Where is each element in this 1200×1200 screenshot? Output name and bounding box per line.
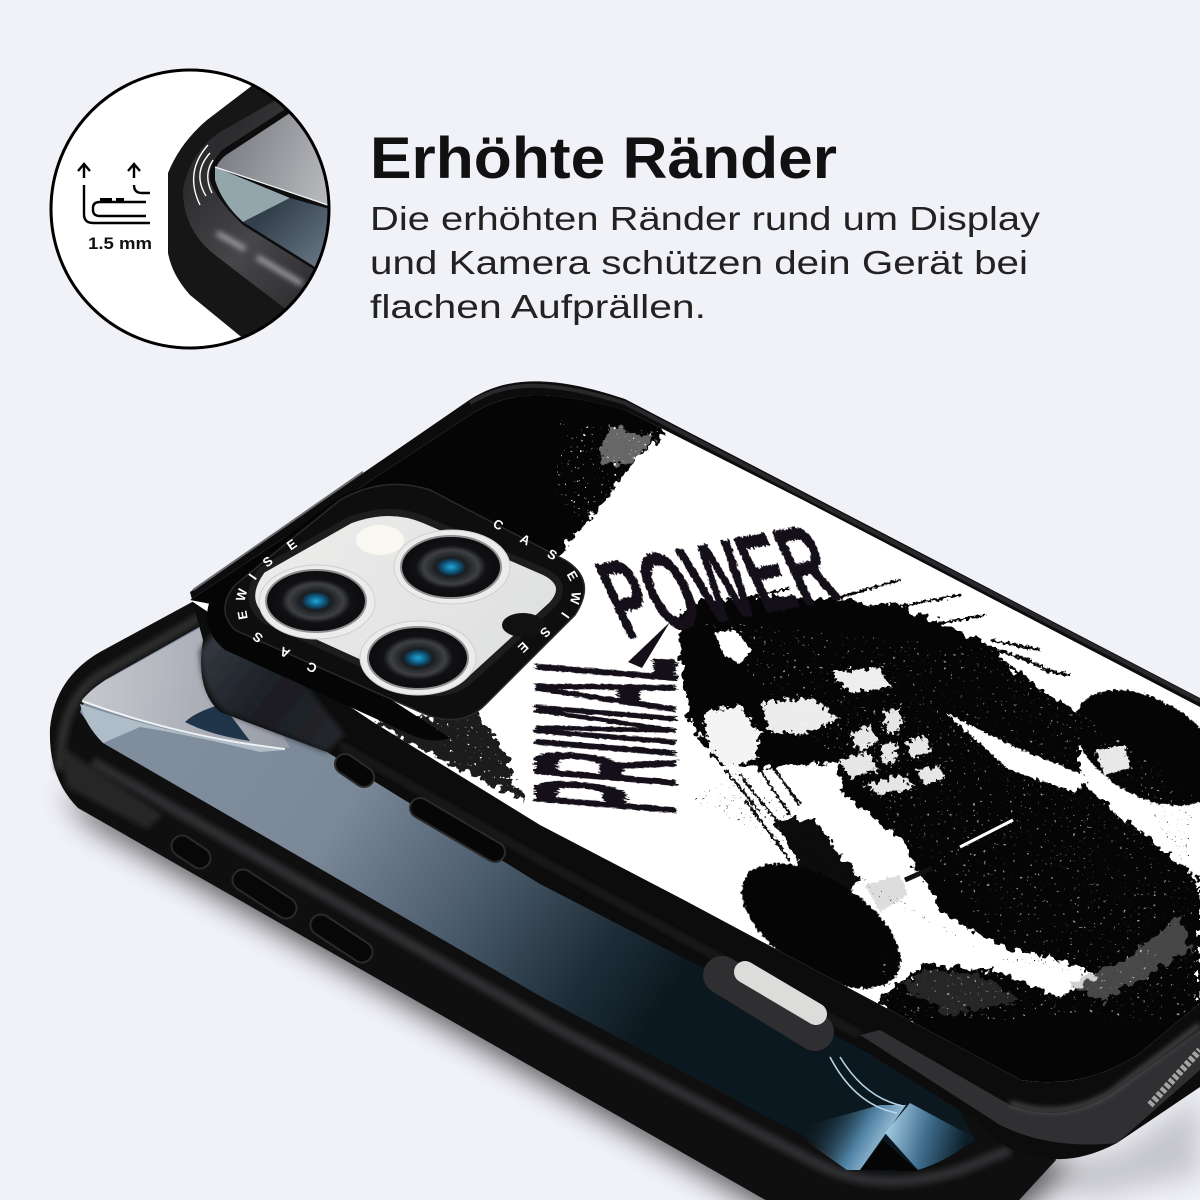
ring lettering: CASEWISE: C — [491, 516, 506, 534]
microphone hole — [502, 613, 544, 637]
text: POWER: POWER — [580, 501, 855, 663]
ring lettering: CASEWISE: E — [284, 536, 300, 553]
camera plate — [252, 512, 560, 692]
torso and legs — [836, 758, 1200, 978]
label: 1.5 mm: 1.5 mm — [88, 234, 152, 253]
figure grain — [700, 620, 1200, 960]
ring lettering: CASEWISE: E — [564, 568, 581, 584]
case side band — [340, 745, 860, 1035]
lettering spike — [628, 622, 670, 668]
white face patch — [714, 630, 752, 664]
side buttons on case — [345, 764, 495, 852]
ink spray below camera — [374, 712, 526, 804]
body text: und Kamera schützen dein Gerät bei — [370, 244, 1028, 281]
back phone shadow — [60, 790, 1070, 1200]
screen dark wedge — [185, 704, 250, 741]
silver edge — [1150, 1050, 1200, 1105]
ring lettering: CASEWISE: A — [518, 531, 533, 549]
back phone bumper — [50, 595, 1056, 1200]
ring lettering: CASEWISE: S — [545, 546, 560, 563]
right weight plate — [1076, 688, 1200, 807]
island side shadow — [207, 482, 470, 740]
ring lettering: CASEWISE: S — [250, 629, 266, 646]
ring lettering: CASEWISE: S — [537, 624, 554, 641]
charging port — [722, 975, 815, 1032]
artwork white ground — [180, 380, 1200, 1100]
front phone: case back — [190, 381, 1200, 1159]
left weight plate — [740, 862, 902, 990]
left arm — [725, 770, 860, 900]
screen grey area — [82, 618, 290, 748]
corner lighter band — [860, 1030, 1200, 1145]
hand and bar — [865, 875, 908, 912]
chest highlights — [838, 708, 945, 795]
body text — [370, 200, 1041, 325]
ink speckles — [695, 719, 1199, 980]
carbon corner patch — [60, 746, 163, 829]
screen blue tip — [790, 1057, 975, 1171]
barbell highlight — [960, 820, 1013, 847]
case outer body — [190, 381, 1200, 1159]
side buttons — [182, 846, 362, 952]
ring lettering: CASEWISE: E — [515, 639, 532, 656]
camera island — [207, 482, 584, 740]
lens: bottom — [360, 621, 476, 695]
white arm and shoulder patches — [704, 706, 760, 768]
icon: raised edge diagram — [78, 164, 150, 223]
ring lettering: CASEWISE: W — [567, 591, 584, 606]
lens: top — [394, 530, 510, 604]
ring lettering: CASEWISE: I — [558, 610, 573, 621]
ring lettering: CASEWISE: C — [304, 658, 319, 676]
detail circle: raised edges — [51, 70, 340, 348]
island ring — [225, 484, 584, 720]
ring lettering: CASEWISE: S — [260, 553, 276, 570]
screen pale area — [80, 704, 285, 752]
back phone screen — [80, 618, 975, 1172]
back phone: front side with screen — [50, 595, 1056, 1200]
hair and head — [676, 594, 1082, 772]
ring lettering: CASEWISE: E — [234, 609, 251, 621]
bottom ink smudge — [878, 914, 1200, 1082]
body text: Die erhöhten Ränder rund um Display — [370, 200, 1041, 237]
case artwork — [180, 380, 1200, 1100]
ring lettering: CASEWISE — [233, 516, 584, 676]
translucent side corner — [200, 600, 345, 752]
body text: flachen Aufprällen. — [370, 288, 706, 325]
ink spray top — [190, 396, 666, 604]
ring lettering: CASEWISE: I — [245, 571, 260, 582]
text: PRIMAL: PRIMAL — [492, 644, 720, 820]
front phone soft shadow — [1040, 1095, 1200, 1200]
flying hair strands — [740, 578, 1071, 677]
flash — [356, 525, 404, 555]
figure: lifter — [676, 580, 1200, 1014]
pressure arcs — [194, 145, 213, 205]
lens: left — [259, 565, 375, 639]
upper rim highlight — [193, 472, 363, 590]
ring lettering: CASEWISE: A — [277, 643, 292, 661]
heading: Erhöhte Ränder — [370, 126, 837, 191]
ring lettering: CASEWISE: W — [233, 586, 251, 603]
phone corner close-up — [168, 86, 328, 337]
